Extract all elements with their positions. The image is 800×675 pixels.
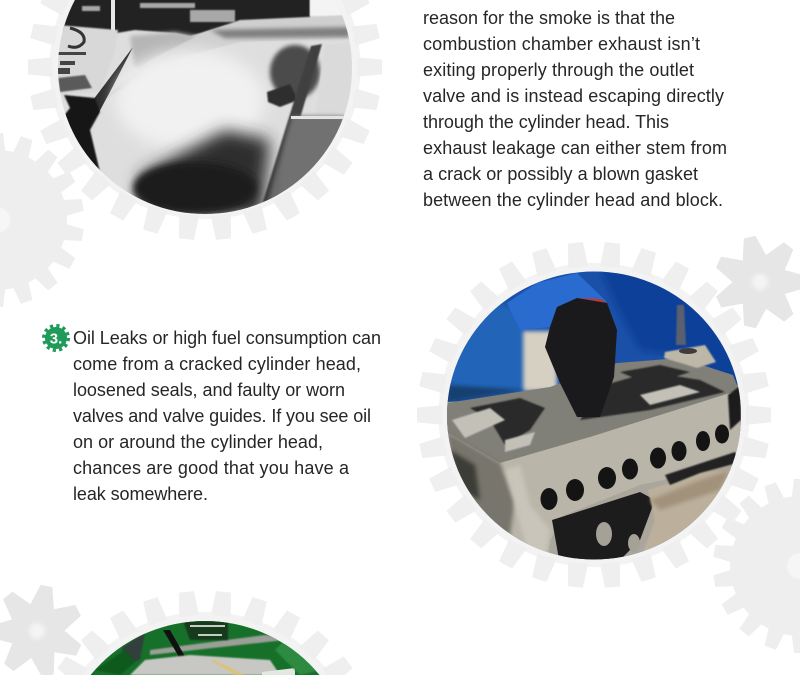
glove sleeve (507, 273, 607, 330)
engine front face (500, 392, 741, 552)
text block: smoke explanation: between the cylinder head and block. (423, 190, 723, 210)
engine top deck (447, 358, 741, 463)
text block: oil leaks explanation: on or around the cylinder head, (73, 432, 323, 452)
text block: smoke explanation: exhaust leakage can either stem from (423, 138, 727, 158)
photo: gloved hand on engine cylinder head (447, 269, 741, 570)
black glove (545, 298, 617, 417)
photo: green engine bay (90, 621, 320, 675)
intake ports (540, 424, 729, 510)
lower black block (552, 492, 655, 565)
text block: oil leaks explanation: loosened seals, and faulty or worn (73, 380, 345, 400)
text block: smoke explanation: a crack or possibly a blown gasket (423, 164, 698, 184)
gear ring around smoke photo (28, 0, 382, 240)
background garage, dark (58, 0, 310, 36)
text block: oil leaks explanation: come from a cracked cylinder head, (73, 354, 361, 374)
roof and wiper (102, 15, 352, 100)
text block: smoke explanation: exiting properly through the outlet (423, 60, 694, 80)
text block: oil leaks explanation: Oil Leaks or high fuel consumption can (73, 328, 381, 348)
text block: smoke explanation (423, 8, 727, 210)
text block: oil leaks explanation: leak somewhere. (73, 484, 208, 504)
text block: smoke explanation: valve and is instead escaping directly (423, 86, 724, 106)
gear ring around engine photo (417, 242, 771, 588)
icon: numbered green gear badge (44, 326, 68, 350)
sign at left (58, 25, 118, 95)
photo: smoke-filled car (58, 0, 352, 220)
text block: oil leaks explanation: chances are good that you have a (73, 458, 350, 478)
gear ring around green engine photo (28, 591, 382, 675)
lower right bench (644, 470, 730, 551)
text block: smoke explanation: through the cylinder head. This (423, 112, 669, 132)
text block: oil leaks explanation (73, 328, 381, 504)
text block: smoke explanation: reason for the smoke is that the (423, 8, 675, 28)
dark footwell (140, 130, 270, 215)
icon: numbered green gear badge: 3. (50, 330, 62, 348)
silver base behind everything (447, 385, 741, 570)
text block: smoke explanation: combustion chamber exhaust isn’t (423, 34, 700, 54)
background small gear: lower left (0, 576, 94, 675)
text block: oil leaks explanation: valves and valve guides. If you see oil (73, 406, 371, 426)
background small gear: upper right (703, 226, 800, 340)
background gear: left solid (0, 133, 84, 307)
driver (270, 45, 320, 99)
background gear: right solid (713, 479, 800, 653)
